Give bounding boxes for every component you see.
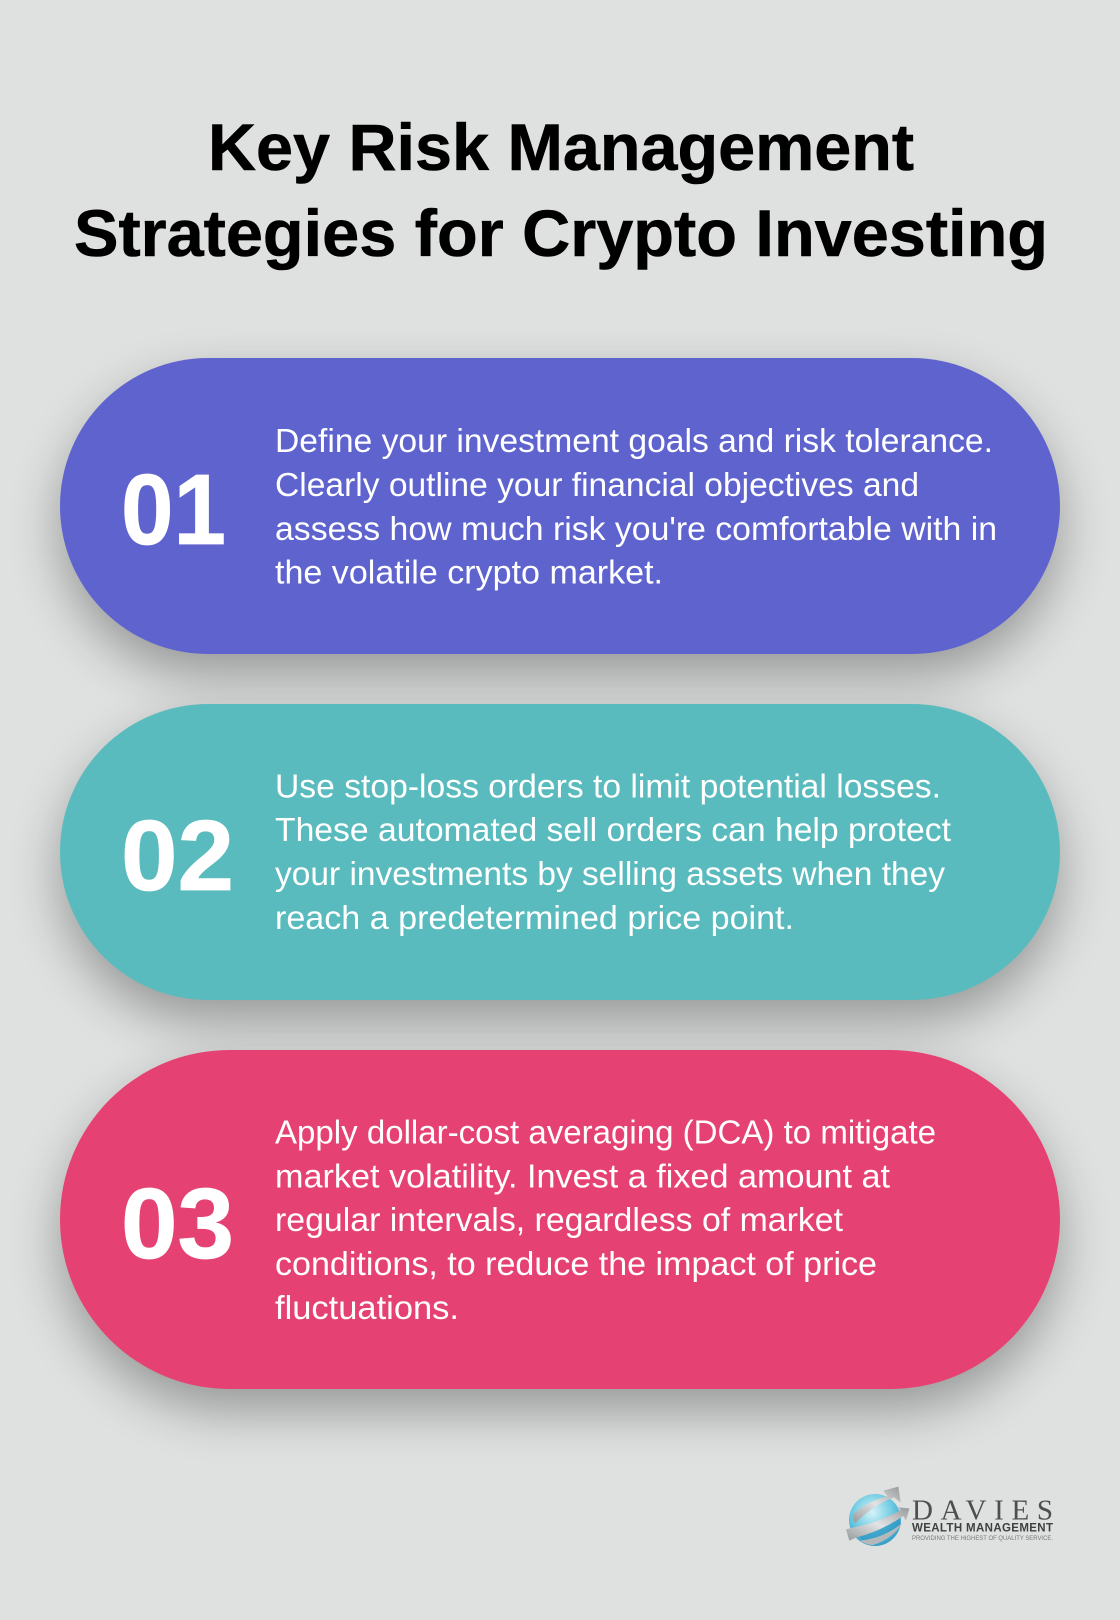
step 03 text [275, 1114, 936, 1326]
step 01 text: Define your investment goals and risk tolerance. [275, 422, 993, 459]
step 03 text: Apply dollar-cost averaging (DCA) to mitigate [275, 1114, 936, 1150]
step 01 text [275, 422, 997, 590]
step 01 text: Clearly outline your financial objectives and [275, 466, 919, 503]
step 01 text: the volatile crypto market. [275, 554, 663, 590]
title: Strategies for Crypto Investing [74, 196, 1048, 270]
logo: Davies Wealth Management: WEALTH MANAGEMENT [912, 1522, 1053, 1534]
logo: Davies Wealth Management: PROVIDING THE HIGHEST OF QUALITY SERVICE. [912, 1535, 1053, 1542]
step 02 text: your investments by selling assets when they [275, 855, 946, 892]
step 03 text: fluctuations. [275, 1289, 459, 1326]
step 03 text: conditions, to reduce the impact of price [275, 1245, 877, 1282]
number 02: 02 [121, 800, 234, 912]
icon: globe with arrows [846, 1487, 909, 1546]
step 02 text [275, 768, 951, 936]
step 01 text: assess how much risk you're comfortable with in [275, 510, 997, 547]
step 02 text: reach a predetermined price point. [275, 899, 794, 936]
step 02 text: Use stop-loss orders to limit potential losses. [275, 768, 941, 804]
step 02 text: These automated sell orders can help protect [275, 811, 951, 848]
title: Key Risk Management [208, 110, 914, 184]
number 01: 01 [121, 454, 226, 566]
title [74, 110, 1048, 270]
panel: step 02 [60, 704, 1060, 1000]
step 03 text: market volatility. Invest a fixed amount at [275, 1158, 890, 1194]
panel: step 03 [60, 1050, 1060, 1389]
step 03 text: regular intervals, regardless of market [275, 1201, 843, 1238]
number 03: 03 [121, 1168, 234, 1280]
panel: step 01 [60, 358, 1060, 654]
logo wordmark: DAVIES [912, 1494, 1053, 1526]
